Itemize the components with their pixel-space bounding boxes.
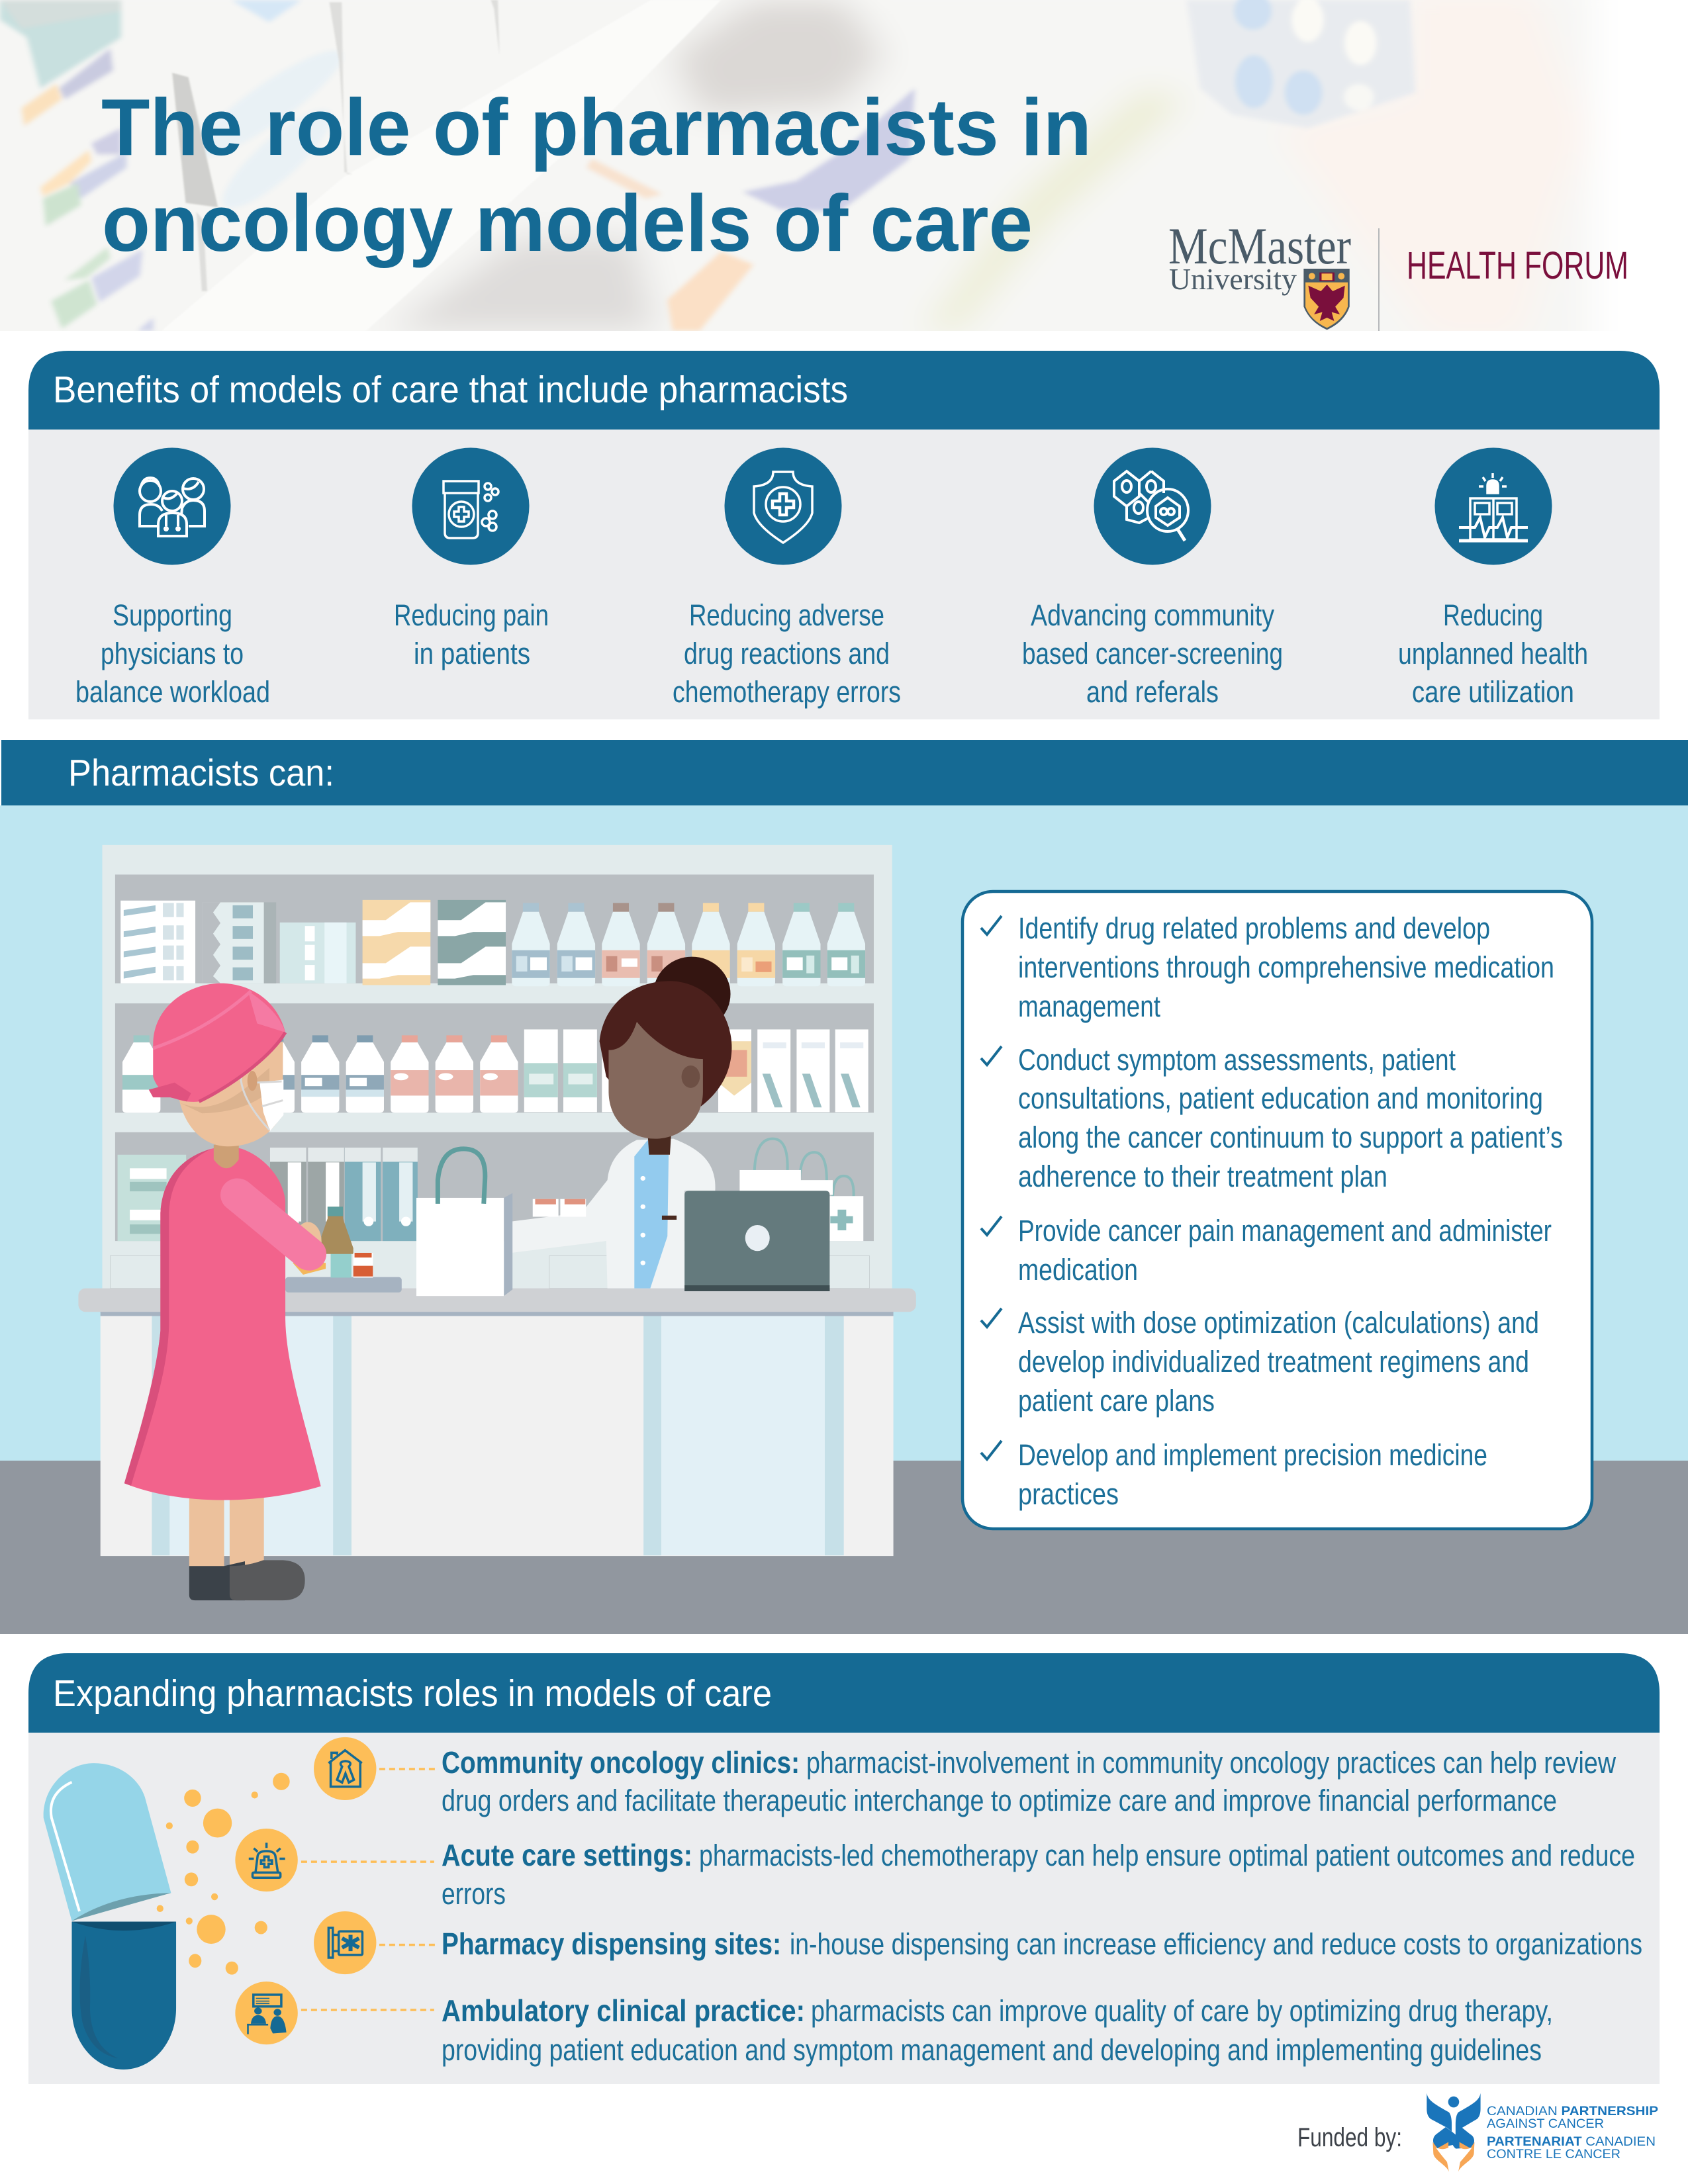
label: reducing adverse reactions: chemotherapy errors [673, 675, 901, 709]
task 2: consultations, patient education and monitoring [1018, 1081, 1543, 1115]
task 5 [981, 1438, 1487, 1511]
role: acute care settings: Acute care settings: [442, 1838, 692, 1872]
role: community oncology clinics: Community oncology clinics: [442, 1745, 800, 1780]
label: reducing adverse reactions [673, 598, 901, 709]
icon: shield [724, 447, 842, 565]
logo: Canadian Partnership Against Cancer: PARTENARIAT CANADIEN [1487, 2134, 1656, 2149]
logo: Canadian Partnership Against Cancer: CONTRE LE CANCER [1487, 2147, 1620, 2161]
task 2 [981, 1043, 1563, 1193]
icon: community clinic [314, 1737, 376, 1800]
task 4 [981, 1306, 1539, 1418]
task 4: patient care plans [1018, 1384, 1215, 1418]
middle shelf bottles [122, 1035, 160, 1113]
panel: pharmacists can [0, 740, 1688, 1634]
title [101, 82, 1092, 268]
icon: medication bottle [412, 447, 530, 565]
callout: pharmacist tasks [962, 891, 1592, 1529]
McMaster University Health Forum logo: McMaster [1168, 217, 1351, 275]
task 2: Conduct symptom assessments, patient [1018, 1043, 1456, 1077]
role: acute care settings: errors [442, 1877, 506, 1911]
role: ambulatory clinical practice: pharmacists can improve quality of care by optimizing drug therapy, [811, 1994, 1553, 2028]
label: supporting physicians [75, 598, 270, 709]
background bags [755, 1139, 854, 1198]
top shelf boxes [120, 901, 195, 983]
label: reducing pain [394, 598, 549, 670]
label: unplanned care utilization: unplanned health [1398, 637, 1588, 670]
header background photo [0, 0, 1688, 375]
task 5: Develop and implement precision medicine [1018, 1438, 1487, 1472]
McMaster University Health Forum logo [1168, 217, 1628, 331]
task 3: Provide cancer pain management and administer [1018, 1214, 1552, 1248]
label: advancing community screening: and referals [1086, 675, 1219, 709]
lower shelf boxes and binders [118, 1155, 186, 1241]
shelving unit [102, 845, 892, 1294]
middle shelf boxes [524, 1029, 558, 1112]
task 1: Identify drug related problems and develop [1018, 911, 1490, 945]
heading: expanding roles [28, 1653, 1660, 1733]
heading: pharmacists can [1, 740, 1688, 805]
role: ambulatory clinical practice: Ambulatory clinical practice: [442, 1993, 805, 2028]
role: community oncology clinics [442, 1745, 1616, 1817]
label: advancing community screening [1022, 598, 1283, 709]
heading: benefits: Benefits of models of care that include pharmacists [53, 369, 848, 411]
label: supporting physicians: balance workload [75, 675, 270, 709]
shopping bag [416, 1149, 512, 1296]
funded by label: Funded by: [1297, 2123, 1402, 2152]
label: advancing community screening: Advancing community [1031, 598, 1274, 632]
label: supporting physicians: Supporting [113, 598, 232, 632]
heading: benefits [28, 351, 1660, 430]
label: reducing pain: Reducing pain [394, 598, 549, 632]
title: The role of pharmacists in [101, 82, 1092, 172]
label: reducing pain: in patients [414, 637, 530, 670]
illustration: opened capsule [44, 1737, 438, 2070]
task 3 [981, 1214, 1552, 1287]
label: reducing adverse reactions: drug reactions and [684, 637, 890, 670]
icon: emergency department [1435, 447, 1552, 565]
title: oncology models of care [102, 178, 1033, 268]
role: pharmacy dispensing sites [442, 1927, 1642, 1961]
task 2: adherence to their treatment plan [1018, 1160, 1387, 1193]
icon: acute care siren [235, 1829, 298, 1891]
logo: Canadian Partnership Against Cancer: CANADIAN PARTNERSHIP [1487, 2104, 1658, 2118]
particles [157, 1773, 290, 1975]
label: advancing community screening: based cancer-screening [1022, 637, 1283, 670]
connector dashes [301, 1769, 438, 2010]
panel: expanding roles [28, 1653, 1660, 2084]
capsule top [44, 1763, 171, 1921]
pharmacist [511, 957, 731, 1289]
task 4: develop individualized treatment regimens and [1018, 1345, 1529, 1379]
capsule bottom [71, 1922, 176, 2070]
illustration: pharmacy counter scene [78, 845, 916, 1600]
role: acute care settings [442, 1838, 1635, 1911]
label: unplanned care utilization [1398, 598, 1588, 709]
task 4: Assist with dose optimization (calculations) and [1018, 1306, 1539, 1340]
task 2: along the cancer continuum to support a patient’s [1018, 1120, 1563, 1154]
icon: pharmacy sign [314, 1911, 376, 1974]
label: supporting physicians: physicians to [101, 637, 244, 670]
task 1: management [1018, 989, 1160, 1023]
label: unplanned care utilization: care utilization [1412, 675, 1574, 709]
label: unplanned care utilization: Reducing [1443, 598, 1543, 632]
panel: benefits [28, 351, 1660, 719]
top shelf bottles [512, 903, 550, 986]
tray and medications [285, 1199, 586, 1293]
icon: physicians [114, 447, 230, 565]
task 1: interventions through comprehensive medication [1018, 950, 1554, 984]
laptop [684, 1191, 829, 1291]
role: ambulatory clinical practice [442, 1993, 1553, 2067]
heading: pharmacists can: Pharmacists can: [68, 752, 334, 794]
task 1 [981, 911, 1554, 1023]
patient [124, 983, 326, 1600]
McMaster University Health Forum logo: University [1169, 262, 1297, 296]
role: pharmacy dispensing sites: Pharmacy dispensing sites: [442, 1927, 781, 1961]
icon: ambulatory clinic [235, 1981, 298, 2044]
task 5: practices [1018, 1477, 1119, 1511]
counter [78, 1289, 916, 1556]
logo: Canadian Partnership Against Cancer [1427, 2093, 1658, 2172]
logo: Canadian Partnership Against Cancer: AGAINST CANCER [1487, 2116, 1604, 2131]
task 3: medication [1018, 1253, 1138, 1287]
label: reducing adverse reactions: Reducing adverse [689, 598, 884, 632]
icon: screening hexagons and magnifier [1094, 447, 1211, 565]
heading: expanding roles: Expanding pharmacists roles in models of care [53, 1672, 772, 1715]
